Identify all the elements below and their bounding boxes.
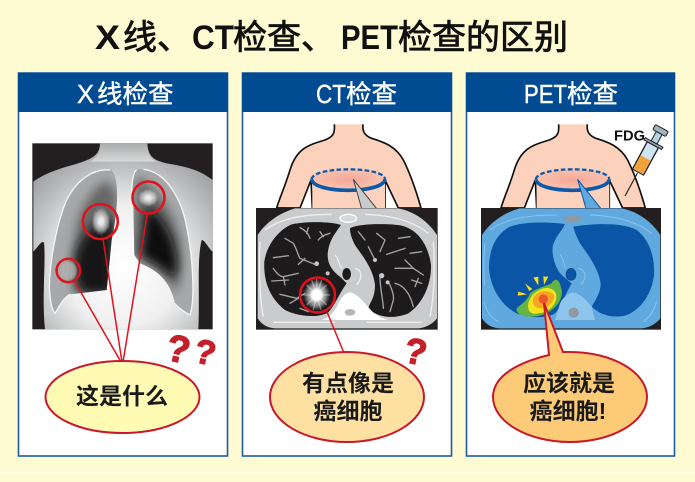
sternum — [564, 215, 582, 223]
heading: CT: CT — [316, 81, 346, 109]
left lung — [49, 170, 117, 313]
mediastinum — [342, 268, 351, 280]
right lung — [132, 169, 193, 315]
heading: CT — [242, 73, 452, 112]
CT cross-section image — [256, 208, 438, 330]
mediastinum — [566, 268, 576, 280]
heading: PET: PET — [524, 81, 567, 109]
red circle and leader line — [300, 278, 344, 353]
heading: CT: 检查 — [346, 81, 397, 109]
PET cross-section image — [481, 208, 661, 330]
question mark: ? — [401, 329, 431, 374]
panel: CT examination — [242, 73, 452, 456]
callout: looks a bit like cancer cells: 癌细胞 — [314, 398, 382, 424]
callout: should be cancer cells: 癌细胞! — [530, 398, 606, 424]
callout: looks a bit like cancer cells — [270, 352, 424, 442]
heading: X-ray: 线检查 — [97, 81, 174, 109]
yellow rays — [518, 277, 548, 296]
hot spot — [516, 280, 562, 317]
heading: PET — [466, 73, 675, 112]
chest X-ray image — [32, 143, 213, 329]
torso illustration — [501, 124, 645, 209]
question marks: ? — [162, 327, 194, 373]
heading: PET: 检查 — [567, 81, 618, 109]
sternum — [340, 214, 357, 222]
callout: what is this: 这是什么 — [76, 383, 168, 409]
title: 、 — [301, 19, 335, 57]
syringe — [616, 123, 671, 201]
title: 检查的区别 — [398, 19, 568, 57]
title: 检查 — [233, 19, 301, 57]
spine — [322, 292, 388, 320]
title: X — [95, 19, 120, 57]
callout: should be cancer cells — [493, 303, 647, 442]
lung vessels — [272, 228, 423, 312]
title: CT — [192, 19, 234, 57]
panel: X-ray examination — [18, 73, 228, 456]
callout: looks a bit like cancer cells: 有点像是 — [302, 370, 394, 396]
spine — [555, 292, 595, 320]
heading: X-ray — [18, 73, 228, 112]
nodule — [303, 279, 330, 310]
title — [95, 19, 568, 57]
FDG label: FDG — [614, 128, 645, 144]
title: PET — [341, 19, 398, 57]
callout: what is this — [46, 361, 200, 433]
torso illustration — [277, 124, 421, 209]
question marks — [162, 327, 219, 374]
title: 、 — [157, 19, 191, 57]
lungs — [489, 222, 654, 317]
nodules — [60, 189, 159, 280]
lungs — [264, 222, 431, 317]
red circles and leader lines — [57, 182, 164, 362]
title: 线 — [123, 19, 157, 57]
question marks: ? — [191, 332, 219, 374]
heading: X-ray: X — [77, 81, 94, 109]
panel: PET examination — [466, 73, 675, 456]
callout: should be cancer cells: 应该就是 — [523, 370, 615, 396]
